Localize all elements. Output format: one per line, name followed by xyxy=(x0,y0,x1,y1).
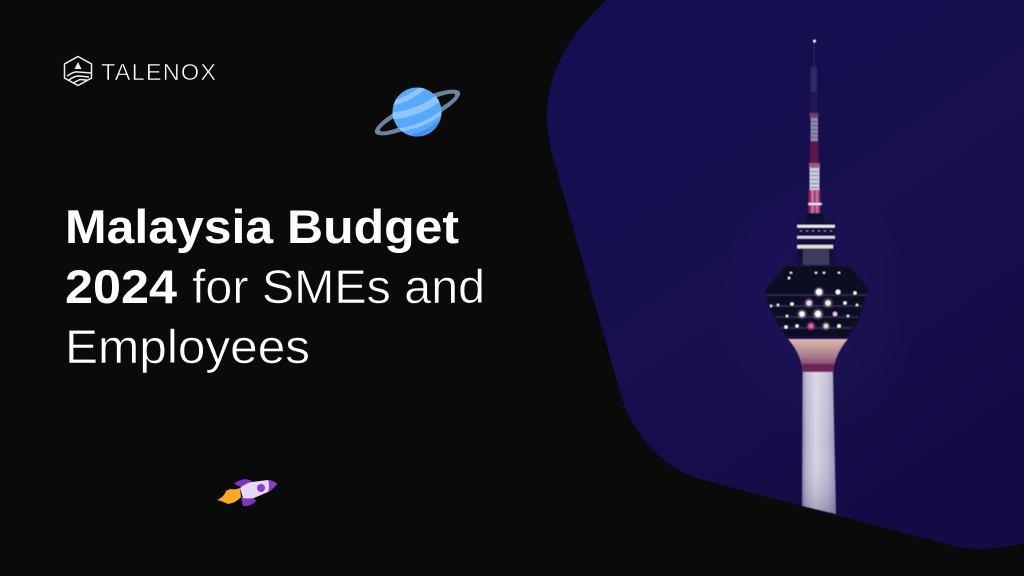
sky glow around tower xyxy=(716,180,916,440)
title line 3: Employees xyxy=(65,320,310,373)
rocket fins xyxy=(234,479,256,506)
planet stripes xyxy=(392,88,442,136)
photo panel: KL Tower at night xyxy=(547,0,1024,549)
logo wordmark: TALENOX xyxy=(101,59,216,85)
shaft shading xyxy=(802,372,836,514)
icon: rocket xyxy=(217,479,277,506)
tower antenna mast xyxy=(808,40,822,214)
logo: Talenox xyxy=(64,56,216,86)
rocket nose xyxy=(268,480,277,492)
mast lattice xyxy=(810,117,818,190)
tower pod xyxy=(765,266,868,337)
tower upper deck xyxy=(797,213,835,265)
rocket body xyxy=(240,480,277,498)
icon: hexagon mountain logo xyxy=(64,56,92,86)
rocket window xyxy=(257,484,265,492)
title line 2: 2024 xyxy=(65,260,177,313)
planet ring xyxy=(370,82,465,143)
tower shaft xyxy=(802,372,836,514)
tower: KL Tower xyxy=(765,40,868,514)
icon: ringed planet xyxy=(374,88,460,136)
title xyxy=(65,200,485,373)
title line 2: for SMEs and xyxy=(192,260,485,313)
rocket flame xyxy=(217,488,241,504)
title line 2 xyxy=(65,260,485,313)
tower neck band xyxy=(802,364,834,372)
tower lotus base xyxy=(788,339,848,366)
title line 1: Malaysia Budget xyxy=(65,200,459,253)
panel: rounded night sky shape xyxy=(547,0,1024,549)
planet body xyxy=(392,88,442,136)
tower pod lights xyxy=(770,272,858,331)
